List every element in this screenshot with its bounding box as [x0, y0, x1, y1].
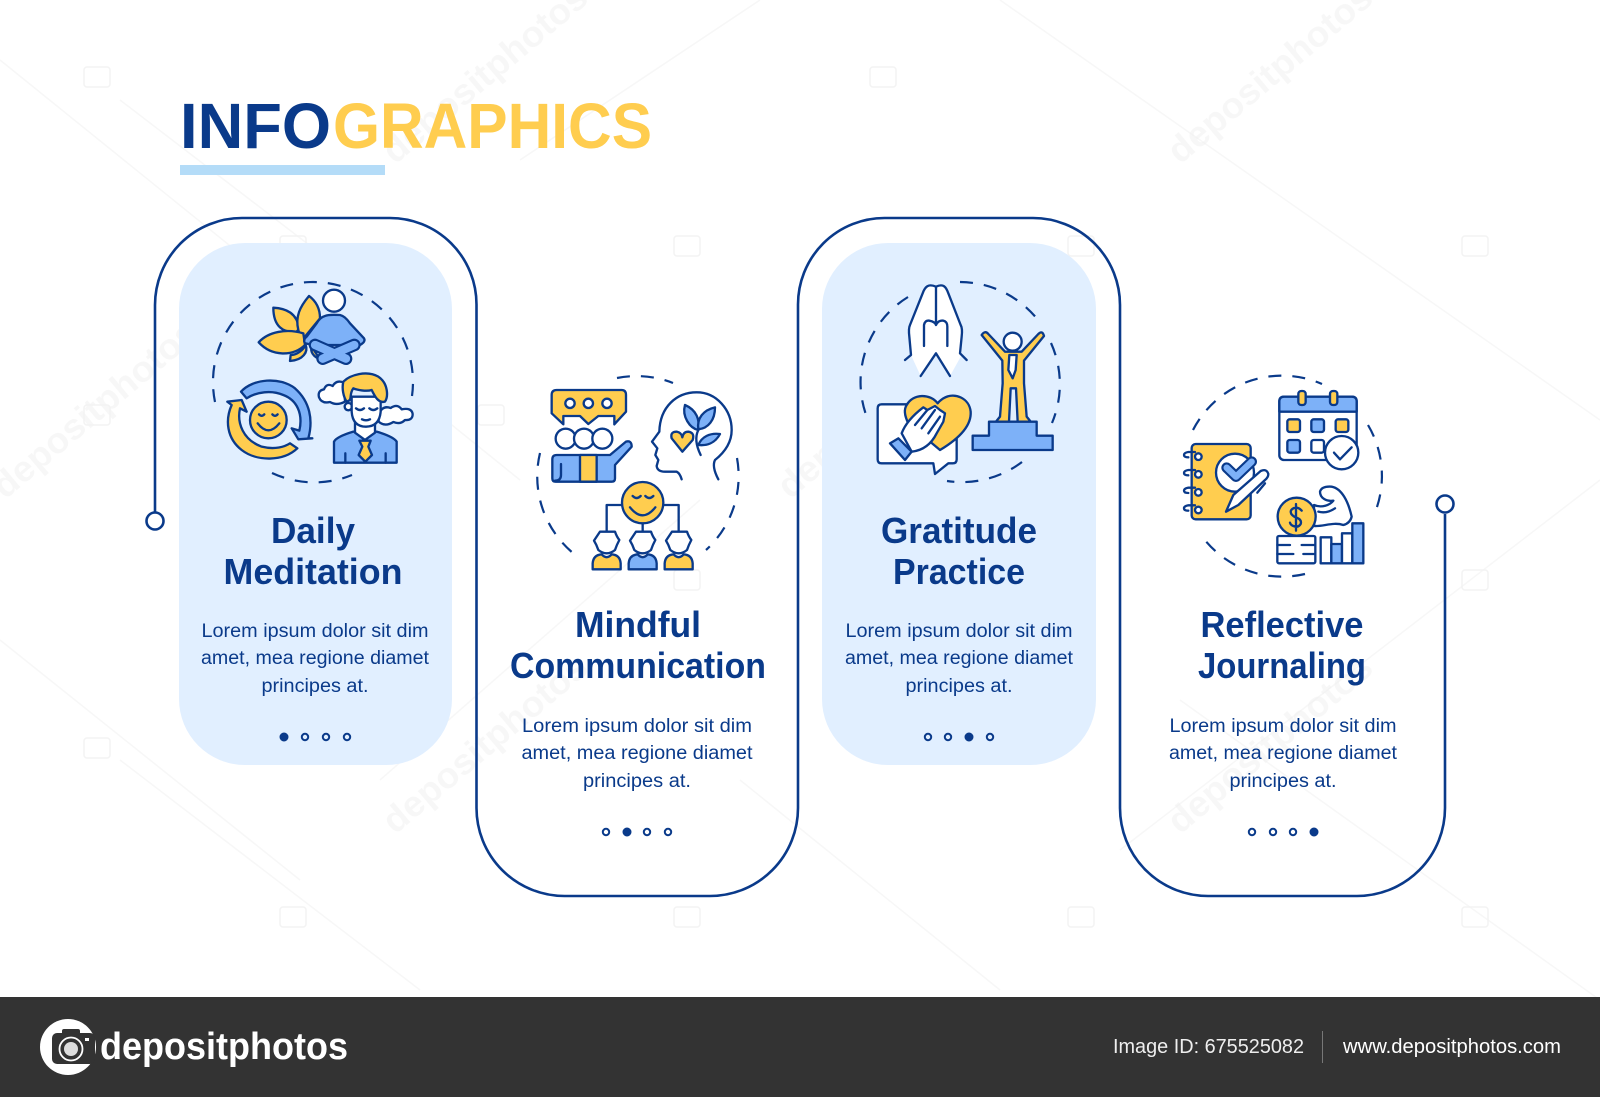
title: INFO — [180, 90, 331, 162]
heading: gratitude practice: Practice — [893, 551, 1025, 592]
icon: gratitude group — [878, 285, 1053, 474]
title: GRAPHICS — [333, 90, 652, 162]
heading: daily meditation: Meditation — [224, 551, 402, 592]
text block 3: amet, mea regione diamet — [845, 648, 1074, 669]
heading: daily meditation — [224, 510, 402, 592]
website: www.depositphotos.com — [1342, 1036, 1561, 1058]
heading: reflective journaling: Journaling — [1198, 645, 1366, 686]
watermark pattern: depositphotos — [769, 311, 990, 506]
icon: coin, arm, bars — [1277, 487, 1363, 563]
icon: camera logo — [40, 1019, 96, 1075]
text block 3: Lorem ipsum dolor sit dim — [846, 621, 1072, 642]
icon: smiley — [250, 402, 287, 438]
watermark pattern: depositphotos — [1159, 646, 1380, 841]
heading: reflective journaling: Reflective — [1200, 604, 1364, 645]
text block 1: Lorem ipsum dolor sit dim — [202, 621, 428, 642]
text block 2: principes at. — [583, 771, 691, 792]
panel: gratitude practice background — [822, 243, 1096, 765]
pagination dots 3 — [925, 734, 993, 740]
icon: praying hands — [905, 285, 967, 376]
heading: gratitude practice — [881, 510, 1037, 592]
text block 2 — [522, 716, 753, 792]
heading: gratitude practice: Gratitude — [881, 510, 1037, 551]
icon: speech bubble — [552, 390, 626, 424]
text block 4: principes at. — [1230, 771, 1336, 792]
text block 2: amet, mea regione diamet — [522, 743, 753, 764]
pagination dots 2 — [603, 828, 671, 836]
logo wordmark: depositphotos — [100, 1026, 348, 1068]
icon: head with heart and leaves — [652, 392, 732, 479]
icon: sitting person — [304, 290, 364, 359]
icon: hierarchy with smiley — [593, 482, 693, 569]
text block 1: principes at. — [262, 676, 368, 697]
footer bar — [0, 997, 1600, 1097]
icon: journaling group — [1184, 391, 1363, 563]
icon: calendar — [1279, 391, 1358, 469]
watermark pattern: depositphotos — [374, 646, 595, 841]
divider — [1322, 1031, 1323, 1063]
pagination dots 1 — [280, 734, 350, 740]
panel: daily meditation background — [179, 243, 452, 765]
heading: reflective journaling — [1198, 604, 1366, 686]
title underline — [180, 165, 385, 175]
dashed ring 4 — [1193, 376, 1382, 577]
icon: meditation group — [227, 290, 413, 463]
icon: yellow arrow — [227, 400, 297, 459]
pagination dots 4 — [1249, 828, 1318, 836]
icon: calm person with clouds — [319, 374, 413, 463]
icon: notebook with check and pen — [1184, 444, 1268, 519]
heading: mindful communication — [510, 604, 766, 686]
title — [180, 90, 652, 162]
heading: mindful communication: Communication — [510, 645, 766, 686]
text block 1: amet, mea regione diamet — [201, 648, 430, 669]
text block 4: amet, mea regione diamet — [1169, 743, 1398, 764]
icon: speech bubble with heart and hand — [878, 396, 971, 474]
panel: gratitude practice — [845, 282, 1074, 740]
icon: blue arrow — [241, 381, 312, 439]
text block 3: principes at. — [906, 676, 1012, 697]
dashed ring 2 — [537, 376, 739, 557]
text block 4: Lorem ipsum dolor sit dim — [1170, 716, 1396, 737]
panel: reflective journaling — [1169, 376, 1398, 836]
heading: mindful communication: Mindful — [575, 604, 701, 645]
text block 4 — [1169, 716, 1398, 792]
icon: team speaking — [552, 429, 632, 482]
heading: daily meditation: Daily — [271, 510, 355, 551]
icon: lotus petals — [259, 296, 320, 361]
connecting serpentine outline — [146, 218, 1454, 896]
text block 2: Lorem ipsum dolor sit dim — [522, 716, 752, 737]
icon: person on podium — [973, 332, 1053, 450]
image id: Image ID: 675525082 — [1113, 1036, 1304, 1058]
panel: daily meditation — [201, 282, 430, 740]
dashed ring 1 — [213, 282, 413, 482]
icon: communication group — [552, 390, 732, 569]
dashed ring 3 — [861, 282, 1060, 482]
panel: mindful communication — [510, 376, 766, 836]
text block 1 — [201, 621, 430, 697]
text block 3 — [845, 621, 1074, 697]
